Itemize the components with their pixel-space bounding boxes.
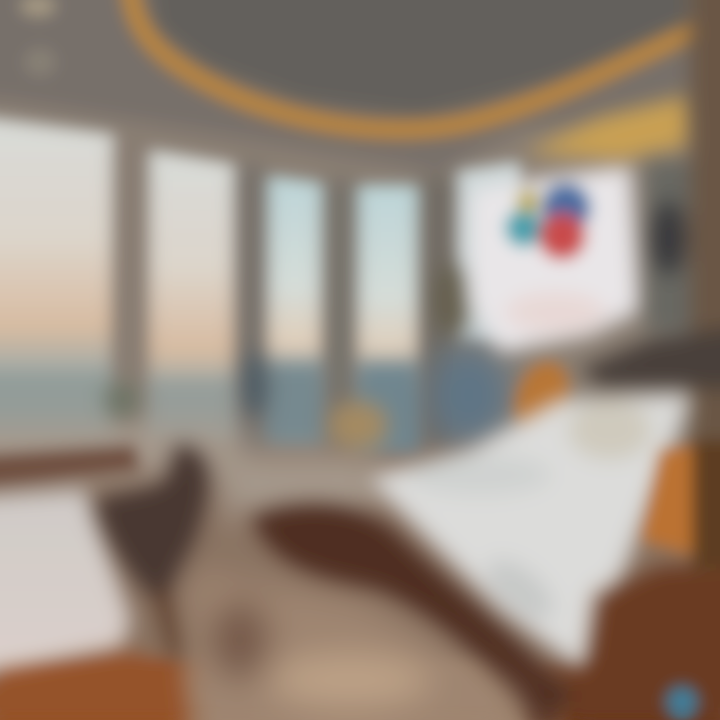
brown bed throw xyxy=(250,503,575,720)
orange upper right wall light xyxy=(525,95,690,160)
window 5 xyxy=(456,162,520,340)
wooden bed frame bottom right xyxy=(580,560,720,720)
dark chair xyxy=(95,444,210,661)
small blue dot xyxy=(666,686,698,718)
ceiling xyxy=(0,0,720,172)
white sign panel xyxy=(470,165,640,352)
white bed xyxy=(368,395,690,670)
colourful circle logo xyxy=(506,184,590,259)
window 4 xyxy=(354,186,420,450)
ceiling spotlights xyxy=(20,0,56,76)
window 3 xyxy=(264,176,324,440)
small armchair by window xyxy=(104,264,472,449)
window 2 xyxy=(145,150,236,440)
orange pillow xyxy=(506,354,578,442)
centre floor rug xyxy=(190,570,520,720)
left desk edge xyxy=(0,445,140,492)
window 1 xyxy=(0,112,116,425)
wooden floor bottom left xyxy=(0,650,185,720)
window pillars xyxy=(116,135,454,455)
orange ceiling cove light xyxy=(130,0,700,130)
orange headboard panel xyxy=(640,440,720,570)
white left floor reflection xyxy=(0,490,130,680)
sea horizon xyxy=(0,360,420,450)
windows xyxy=(0,112,520,450)
lower room haze xyxy=(0,343,512,515)
dark right column and objects xyxy=(580,0,720,460)
